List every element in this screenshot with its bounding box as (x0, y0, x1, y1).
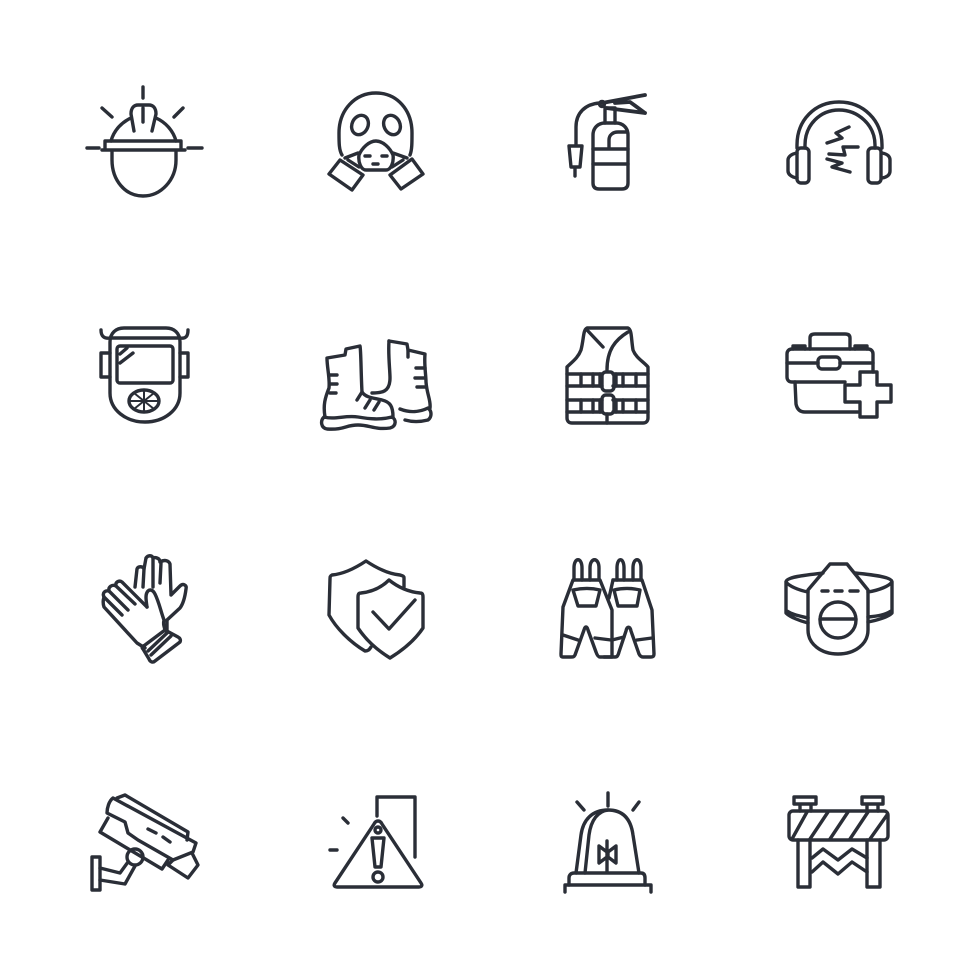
icon: road barrier (789, 797, 888, 887)
icon: dust mask with filter (786, 564, 892, 654)
icon: ear muffs with noise (788, 102, 890, 183)
icon: safety boots (322, 341, 431, 429)
icon: security camera (92, 795, 198, 890)
icon: alarm siren (565, 793, 651, 892)
icon: work overalls (561, 560, 654, 657)
icon: first aid kit (787, 334, 891, 417)
icon: hard hat with rays (87, 87, 202, 196)
icon: work gloves (103, 556, 186, 662)
icon: gas mask (329, 93, 423, 190)
icon: security shields with check (329, 561, 423, 658)
icon: fire extinguisher (569, 95, 645, 189)
icon: life vest (567, 328, 648, 423)
icon: welding mask (101, 328, 188, 422)
icon: warning triangle and exit (330, 797, 422, 887)
